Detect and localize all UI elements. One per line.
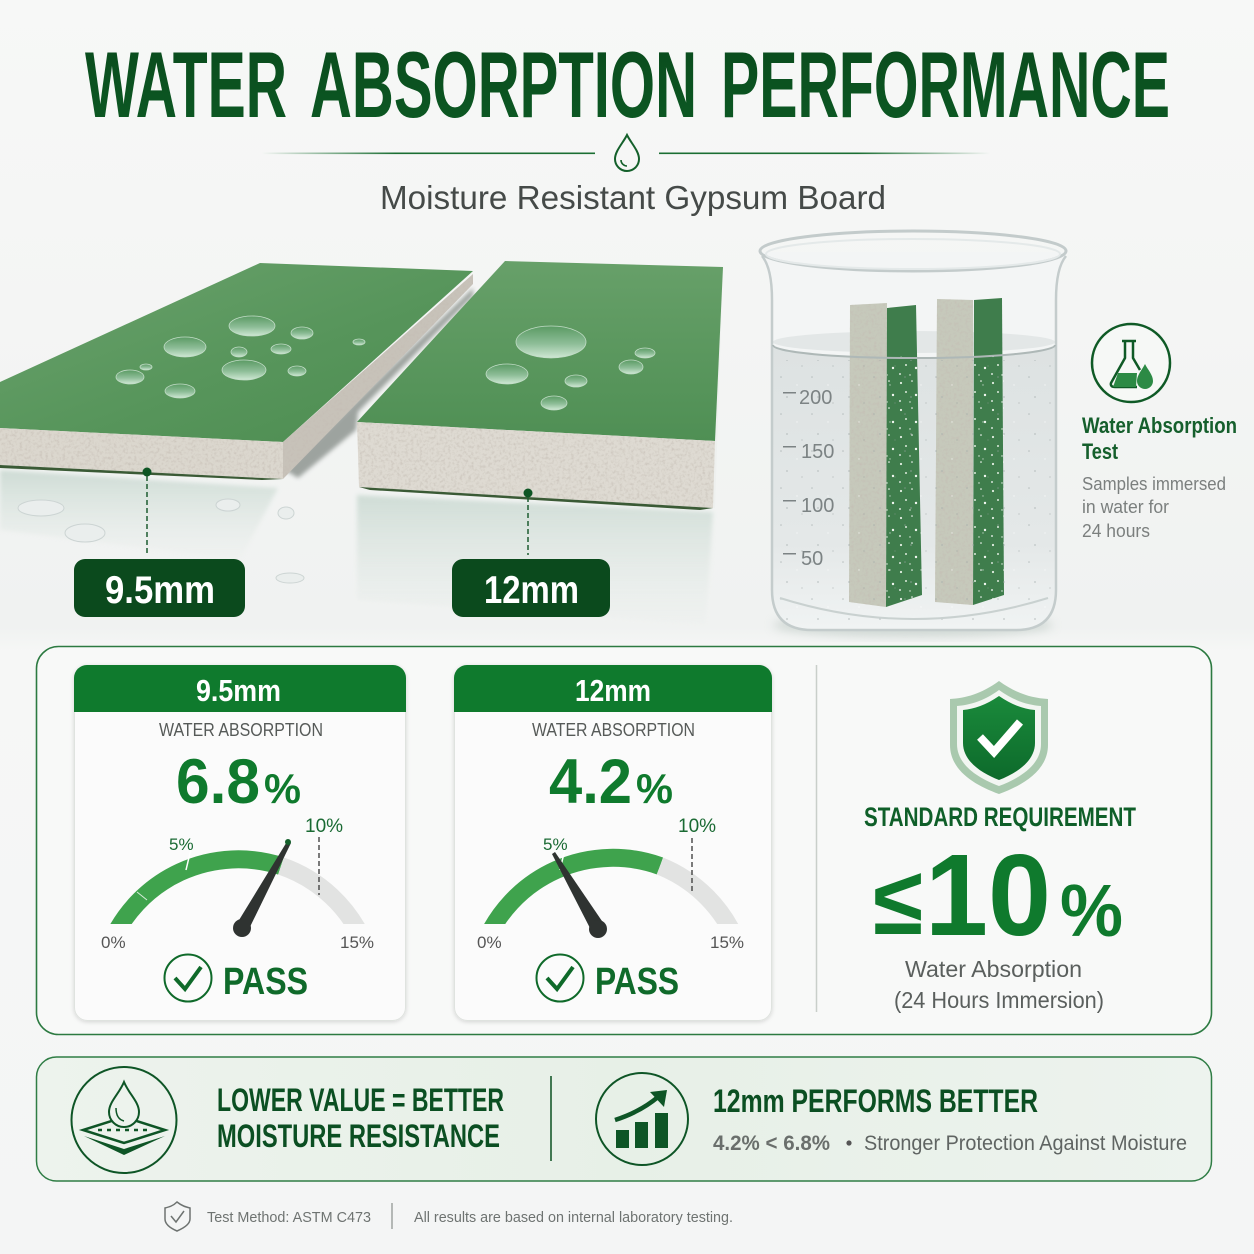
beaker scale: 100 bbox=[801, 495, 834, 517]
requirement caption: (24 Hours Immersion) bbox=[894, 987, 1104, 1013]
glass outline bbox=[760, 231, 1066, 630]
board: 9.5mm bbox=[0, 263, 473, 480]
pass badge: PASS bbox=[595, 961, 679, 1003]
requirement caption: Water Absorption bbox=[905, 956, 1082, 982]
gauge: 0% bbox=[477, 933, 502, 952]
metric value: % bbox=[636, 765, 673, 812]
icon: small shield bbox=[165, 1202, 190, 1231]
panel: takeaways banner bbox=[36, 1057, 1212, 1181]
title bbox=[85, 32, 1170, 137]
requirement value: 10 bbox=[925, 830, 1051, 960]
gypsum strips bbox=[849, 298, 1004, 607]
callout body: Samples immersed bbox=[1082, 474, 1226, 494]
card header: 12mm bbox=[575, 673, 651, 708]
callout heading: Test bbox=[1082, 439, 1119, 464]
card: 12mm result bbox=[454, 665, 772, 1020]
gauge: 5% bbox=[169, 835, 194, 854]
label: 12mm: 12mm bbox=[484, 569, 579, 612]
title divider with water drop icon bbox=[262, 135, 990, 171]
gauge: 10% bbox=[678, 816, 716, 837]
gauge: 15% bbox=[710, 933, 744, 952]
droplets on the surface bbox=[18, 499, 304, 583]
icon: flask bbox=[1092, 324, 1170, 402]
gauge bbox=[101, 816, 374, 952]
icon: shield with check bbox=[950, 681, 1048, 794]
gauge: 15% bbox=[340, 933, 374, 952]
metric value: 4.2 bbox=[549, 747, 632, 817]
metric value: % bbox=[264, 765, 301, 812]
board: 12mm bbox=[357, 261, 723, 510]
label: 9.5mm bbox=[74, 559, 245, 617]
standard requirement block bbox=[864, 681, 1136, 1013]
takeaway: 12mm performs better: Stronger Protection Against Moisture bbox=[864, 1132, 1187, 1155]
footer bbox=[165, 1202, 733, 1231]
card header bbox=[454, 665, 772, 712]
water bbox=[773, 345, 1055, 628]
pass badge bbox=[536, 954, 679, 1003]
takeaway: lower value: MOISTURE RESISTANCE bbox=[217, 1118, 500, 1154]
disclaimer: All results are based on internal laboratory testing. bbox=[414, 1209, 733, 1226]
pass badge bbox=[164, 954, 308, 1003]
gauge: 5% bbox=[543, 835, 568, 854]
label: 12mm bbox=[452, 559, 610, 617]
beaker scale bbox=[783, 387, 834, 570]
glass interior bbox=[760, 252, 1067, 630]
requirement heading: STANDARD REQUIREMENT bbox=[864, 802, 1136, 832]
requirement value: % bbox=[1060, 869, 1123, 952]
takeaway: 12mm performs better: 4.2% < 6.8% bbox=[713, 1132, 830, 1155]
title: WATER bbox=[85, 32, 287, 137]
pass badge: PASS bbox=[223, 961, 308, 1003]
photo: glass beaker with immersed samples bbox=[760, 231, 1067, 637]
test method: Test Method: ASTM C473 bbox=[207, 1209, 371, 1226]
metric value: 6.8 bbox=[176, 747, 260, 817]
beaker scale: 150 bbox=[801, 441, 834, 463]
water droplets bbox=[116, 316, 365, 398]
label: 9.5mm: 9.5mm bbox=[105, 569, 215, 612]
reflections on wet surface bbox=[0, 288, 713, 625]
title: ABSORPTION bbox=[310, 32, 697, 137]
requirement value: ≤ bbox=[873, 848, 923, 955]
callout: water absorption test bbox=[1082, 324, 1237, 541]
card header: 9.5mm bbox=[196, 673, 281, 708]
photo: gypsum board samples bbox=[0, 261, 723, 625]
takeaway: 12mm performs better: 12mm PERFORMS BETTER bbox=[713, 1083, 1038, 1119]
gauge bbox=[477, 816, 744, 952]
card: 9.5mm result bbox=[74, 665, 406, 1020]
takeaway: 12mm performs better bbox=[713, 1083, 1187, 1155]
leader lines bbox=[142, 468, 532, 555]
gauge: 0% bbox=[101, 933, 126, 952]
requirement value bbox=[873, 830, 1123, 960]
callout body: in water for bbox=[1082, 497, 1169, 517]
icon: drop over layered boards bbox=[72, 1067, 176, 1173]
water droplets bbox=[486, 326, 655, 410]
metric label: WATER ABSORPTION bbox=[159, 720, 323, 740]
beaker scale: 200 bbox=[799, 387, 832, 409]
callout body: 24 hours bbox=[1082, 521, 1150, 541]
beaker scale: 50 bbox=[801, 548, 823, 570]
metric label: WATER ABSORPTION bbox=[532, 720, 695, 740]
icon: rising bar chart bbox=[596, 1073, 688, 1165]
subtitle: Moisture Resistant Gypsum Board bbox=[380, 179, 886, 216]
gauge: 10% bbox=[305, 816, 343, 837]
panel: results bbox=[36, 646, 1212, 1034]
card header bbox=[74, 665, 406, 712]
takeaway: lower value: LOWER VALUE = BETTER bbox=[217, 1082, 504, 1118]
